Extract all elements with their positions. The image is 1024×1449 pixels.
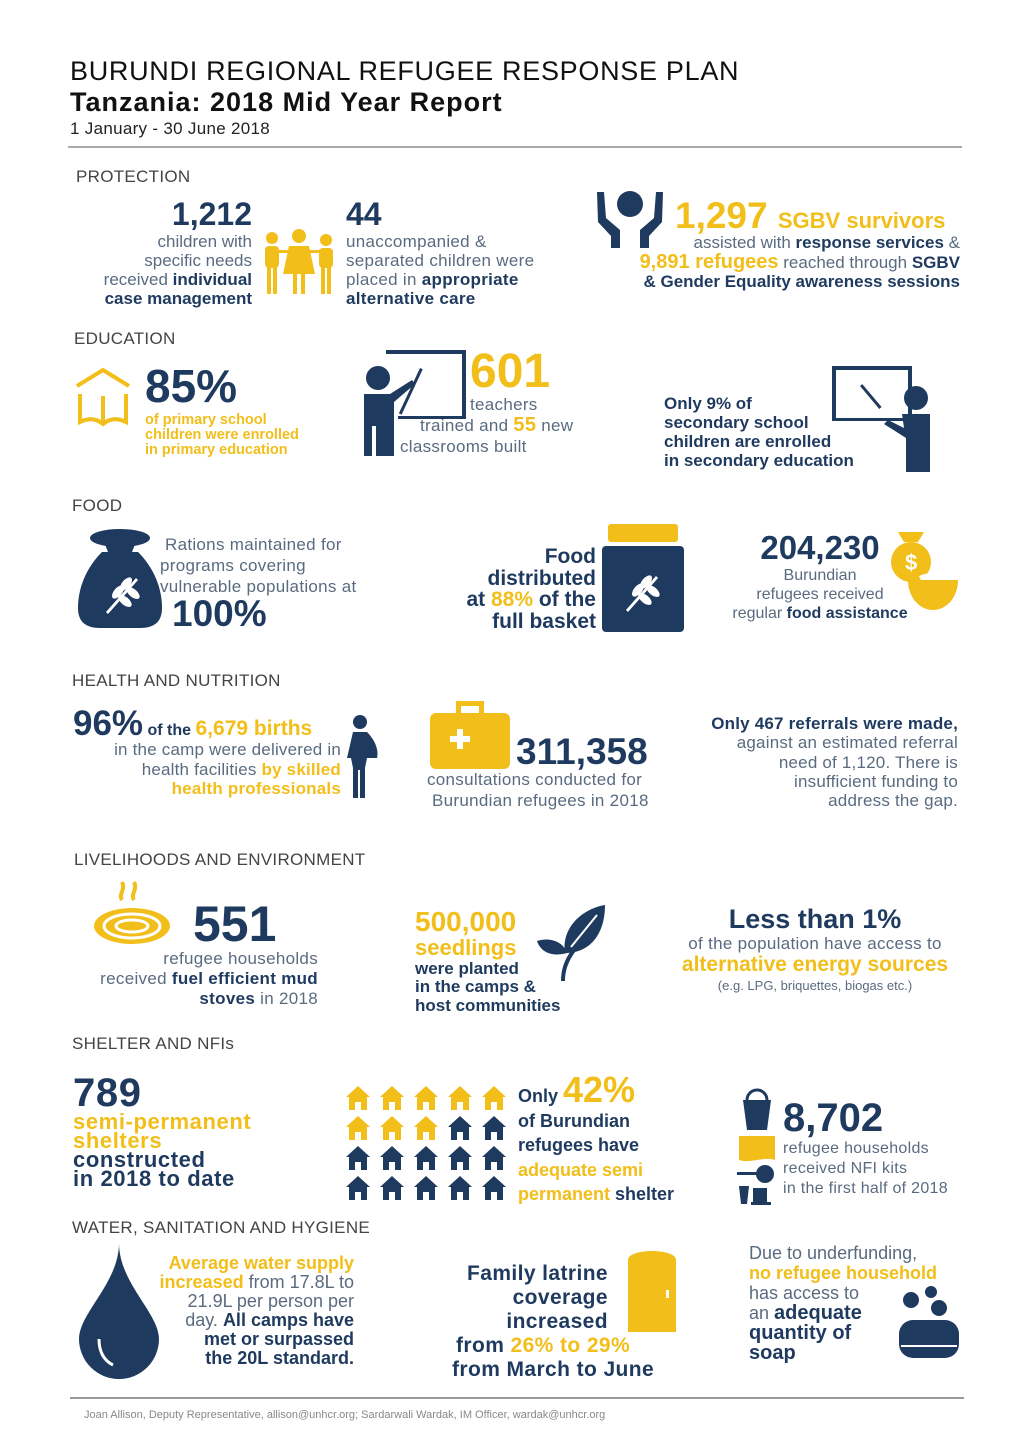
icon: family xyxy=(265,229,333,294)
stat: 8,702 xyxy=(783,1096,948,1197)
text: births detail: health professionals xyxy=(172,779,341,798)
stat: 8,702: 8,702 xyxy=(783,1096,883,1140)
heading: wash: WATER, SANITATION AND HYGIENE xyxy=(72,1218,370,1237)
stat: 85%: children were enrolled xyxy=(145,427,299,443)
footer: Joan Allison, Deputy Representative, allison@unhcr.org; Sardarwali Wardak, IM Officer, wardak@unhcr.org xyxy=(84,1409,605,1421)
text: referrals: against an estimated referral xyxy=(737,733,958,752)
stat: 311,358: 311,358 xyxy=(516,731,648,772)
stat: 85% xyxy=(145,360,299,458)
stat: 1,297 SGBV: 1,297 SGBV survivors xyxy=(675,195,945,236)
title: BURUNDI REGIONAL REFUGEE RESPONSE PLAN xyxy=(70,56,739,86)
text: only 42%: of Burundian xyxy=(518,1110,630,1130)
icon: pregnant woman xyxy=(347,715,378,798)
text: births detail: in the camp were delivered in xyxy=(114,740,341,759)
text: food distributed: Food xyxy=(545,545,596,568)
text: water supply: the 20L standard. xyxy=(205,1348,354,1368)
text: SGBV details: assisted with response services & xyxy=(694,233,960,252)
stat: less than 1% xyxy=(682,904,948,993)
stat: less than 1%: alternative energy sources xyxy=(682,953,948,976)
stat: 500,000 seedlings: were planted xyxy=(415,958,519,978)
text: births detail: health facilities by skilled xyxy=(142,760,341,778)
text: referrals: address the gap. xyxy=(828,791,958,810)
stat: 500,000 seedlings xyxy=(415,906,560,1014)
stat: less than 1%: Less than 1% xyxy=(729,904,901,934)
text: water supply xyxy=(160,1253,354,1368)
stat: 85%: 85% xyxy=(145,360,237,412)
stat: 789 shelters: semi-permanent xyxy=(73,1109,251,1134)
icon: leaf xyxy=(537,905,605,981)
stat: 204,230: 204,230 xyxy=(760,529,880,566)
stat: 44: placed in appropriate xyxy=(346,270,519,289)
text: only 9% xyxy=(664,394,854,470)
text: only 9%: secondary school xyxy=(664,413,809,432)
icon: money bowl: $ xyxy=(905,550,917,575)
text: water supply: 21.9L per person per xyxy=(188,1291,354,1311)
text: latrine: from 26% to 29% xyxy=(456,1334,630,1357)
heading: health: HEALTH AND NUTRITION xyxy=(72,671,281,690)
heading: shelter: SHELTER AND NFIs xyxy=(72,1034,234,1053)
text: teachers trained: classrooms built xyxy=(400,437,527,456)
icon: soap xyxy=(899,1286,959,1358)
text: rations: Rations maintained for xyxy=(165,535,342,554)
stat: 500,000 seedlings: in the camps & xyxy=(415,977,536,996)
text: teachers trained: teachers xyxy=(470,395,538,414)
stat: 789 shelters: 789 xyxy=(73,1071,142,1115)
text: water supply: increased from 17.8L to xyxy=(160,1272,354,1292)
text: referrals: Only 467 referrals were made, xyxy=(711,714,958,733)
text: latrine: coverage xyxy=(513,1286,608,1309)
text: soap: has access to xyxy=(749,1283,859,1303)
stat: 789 shelters: shelters xyxy=(73,1128,162,1153)
text: latrine: increased xyxy=(506,1310,608,1333)
text: soap: soap xyxy=(749,1342,796,1364)
stat: 96% births: 96% of the 6,679 births xyxy=(73,704,312,743)
icon: grain sack xyxy=(78,529,162,628)
icon: hands xyxy=(597,191,663,248)
stat: 44: alternative care xyxy=(346,289,476,308)
heading: food: FOOD xyxy=(72,496,122,515)
stat: 100%: 100% xyxy=(172,593,267,634)
stat: 1,212: 1,212 xyxy=(172,196,252,232)
text: SGBV details xyxy=(640,233,960,291)
stat: 8,702: refugee households xyxy=(783,1140,929,1157)
icon: money bowl xyxy=(891,532,958,610)
stat: 85%: of primary school xyxy=(145,412,267,428)
text: stoves: received fuel efficient mud xyxy=(100,969,318,988)
stat: 204,230 xyxy=(732,529,908,622)
heading: education: EDUCATION xyxy=(74,329,176,348)
text: latrine: Family latrine xyxy=(467,1262,608,1285)
icon: first aid kit xyxy=(430,701,510,769)
heading: livelihoods: LIVELIHOODS AND ENVIRONMENT xyxy=(74,850,366,869)
stat: 44: separated children were xyxy=(346,251,534,270)
icon: teacher xyxy=(364,350,466,456)
icon: latrine door xyxy=(628,1251,676,1332)
text: food distributed: at 88% of the xyxy=(466,588,596,611)
text: births detail xyxy=(114,740,341,798)
heading: protection: PROTECTION xyxy=(76,167,190,186)
stat: 789 shelters xyxy=(73,1071,251,1191)
stat: 204,230: Burundian xyxy=(784,567,856,584)
stat: 44: unaccompanied & xyxy=(346,232,487,251)
text: soap: Due to underfunding, xyxy=(749,1243,917,1263)
text: stoves xyxy=(100,949,318,1008)
text: only 9%: in secondary education xyxy=(664,451,854,470)
text: soap: an adequate xyxy=(749,1302,862,1324)
text: referrals xyxy=(711,714,958,810)
stat: 789 shelters: in 2018 to date xyxy=(73,1166,235,1191)
text: only 42% xyxy=(518,1069,674,1204)
stat: 204,230: refugees received xyxy=(756,586,884,603)
icon grid: houses xyxy=(346,1086,506,1200)
text: stoves: stoves in 2018 xyxy=(199,989,318,1008)
text: only 9%: Only 9% of xyxy=(664,394,752,413)
stat: 601 teachers: 601 xyxy=(470,345,550,398)
stat: 500,000 seedlings: 500,000 xyxy=(415,906,516,937)
text: stoves: refugee households xyxy=(163,949,318,968)
stat: less than 1%: of the population have access to xyxy=(688,934,942,953)
text: only 42%: permanent shelter xyxy=(518,1184,674,1204)
stat: 1,212 xyxy=(104,196,252,308)
stat: 1,212: case management xyxy=(105,289,252,308)
icon: fuel stove xyxy=(94,881,170,944)
stat: 8,702: received NFI kits xyxy=(783,1160,907,1177)
text: latrine xyxy=(452,1262,654,1381)
stat: 204,230: regular food assistance xyxy=(732,605,908,622)
stat: 1,212: received individual xyxy=(104,270,252,289)
icon: book house xyxy=(76,368,130,427)
date: 1 January - 30 June 2018 xyxy=(70,119,270,138)
text: teachers trained: trained and 55 new xyxy=(420,414,573,436)
text: food distributed: full basket xyxy=(492,610,596,632)
stat: less than 1%: (e.g. LPG, briquettes, biogas etc.) xyxy=(718,978,912,993)
text: food distributed xyxy=(466,545,596,632)
text: SGBV details: 9,891 refugees reached through SGBV xyxy=(640,250,960,272)
icon: NFI items xyxy=(737,1088,775,1205)
text: water supply: met or surpassed xyxy=(204,1329,354,1349)
text: only 42%: refugees have xyxy=(518,1135,639,1155)
text: consultations: Burundian refugees in 2018 xyxy=(432,791,649,810)
text: rations: programs covering xyxy=(160,556,306,575)
text: consultations: consultations conducted for xyxy=(427,770,642,789)
text: only 42%: adequate semi xyxy=(518,1160,643,1180)
stat: 500,000 seedlings: seedlings xyxy=(415,935,516,960)
text: SGBV details: & Gender Equality awareness sessions xyxy=(643,272,960,291)
text: soap: quantity of xyxy=(749,1322,851,1344)
stat: 1,212: children with xyxy=(158,232,252,251)
stat: 44 xyxy=(346,196,534,308)
text: teachers trained xyxy=(400,395,573,456)
text: rations xyxy=(160,535,357,596)
text: soap xyxy=(749,1243,937,1364)
text: rations: vulnerable populations at xyxy=(160,577,357,596)
text: referrals: need of 1,120. There is xyxy=(779,753,958,772)
stat: 551: 551 xyxy=(193,896,276,952)
text: latrine: from March to June xyxy=(452,1358,654,1381)
icon: water drop xyxy=(79,1244,159,1379)
text: referrals: insufficient funding to xyxy=(794,772,958,791)
text: water supply: Average water supply xyxy=(169,1253,354,1273)
stat: 44: 44 xyxy=(346,196,382,232)
text: only 9%: children are enrolled xyxy=(664,432,831,451)
text: water supply: day. All camps have xyxy=(185,1310,354,1330)
stat: 500,000 seedlings: host communities xyxy=(415,996,560,1014)
subtitle: Tanzania: 2018 Mid Year Report xyxy=(70,87,503,117)
stat: 85%: in primary education xyxy=(145,442,288,458)
text: soap: no refugee household xyxy=(749,1263,937,1283)
stat: 789 shelters: constructed xyxy=(73,1147,206,1172)
text: only 42%: Only 42% xyxy=(518,1069,635,1110)
icon: board teacher xyxy=(832,366,930,472)
stat: 1,212: specific needs xyxy=(144,251,252,270)
stat: 8,702: in the first half of 2018 xyxy=(783,1180,948,1197)
text: food distributed: distributed xyxy=(488,566,596,590)
icon: food jar xyxy=(602,524,684,632)
text: consultations xyxy=(427,770,649,810)
